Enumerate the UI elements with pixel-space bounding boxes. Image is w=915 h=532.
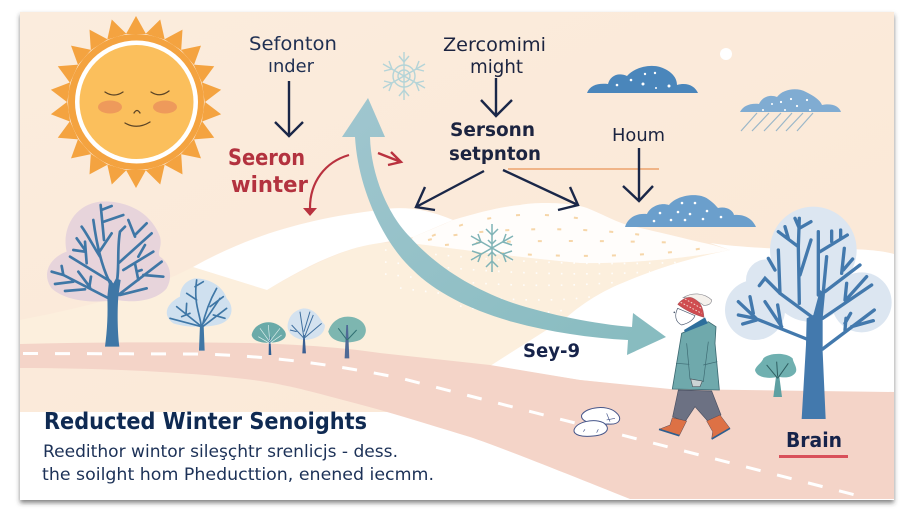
text: Seeron: Seeron [228, 146, 305, 171]
heading: Reducted Winter Senoights [44, 409, 367, 435]
text: Houm: Houm [612, 125, 665, 146]
cloud: dark blue [587, 66, 698, 93]
hill dots [428, 215, 705, 256]
snow hill left [193, 208, 453, 290]
snowflake: lower [471, 224, 513, 272]
hat crown [683, 294, 712, 306]
tree: small teal one [252, 322, 286, 355]
arrow: Zercomimi down [481, 78, 512, 116]
tree: small foreground [755, 354, 796, 397]
road [20, 342, 894, 499]
text: setpnton: setpnton [449, 143, 541, 165]
orange line [508, 168, 659, 170]
cloud: rain [740, 89, 841, 131]
tree: small blue one [288, 308, 325, 353]
hat band [678, 297, 704, 317]
text: Sefonton: Sefonton [249, 33, 337, 55]
cloud: lower [625, 195, 756, 227]
tree: small teal two [328, 317, 366, 358]
text block: summary [42, 409, 434, 485]
boots [659, 415, 730, 439]
text: might: might [470, 56, 523, 78]
arrow: Houm down [623, 148, 653, 201]
face [676, 308, 695, 325]
tree: right large [725, 207, 892, 419]
red curved arrow [303, 155, 349, 216]
body line 2: the soilght hom Pheducttion, enened iecmm. [42, 465, 434, 485]
body line 1: Reedithor wintor sileşçhtr srenlicjs - dess. [43, 442, 398, 462]
text: inder: ınder [268, 56, 315, 77]
label: Brain [779, 428, 848, 458]
glove [691, 379, 702, 387]
snow hill middle [410, 203, 730, 263]
text: Sersonn: Sersonn [450, 119, 535, 141]
person walking [659, 294, 730, 439]
arrow: to right hill [503, 170, 578, 210]
white dot [720, 48, 732, 60]
tree: left medium [167, 278, 232, 351]
tree: left large [47, 201, 170, 347]
snow field right [490, 243, 894, 395]
road dashes [23, 354, 863, 497]
large curved arrow [342, 98, 666, 355]
red small arrow [378, 152, 401, 165]
sky [20, 12, 894, 412]
arrow: to left hill [416, 171, 484, 210]
arrow: Sefonton down [275, 81, 303, 136]
label: Brain: Brain [786, 428, 842, 452]
snow rocks [574, 408, 620, 436]
snowflake: upper [383, 52, 425, 100]
text: Zercomimi: Zercomimi [443, 34, 546, 56]
sun [49, 16, 223, 188]
white sand dots [385, 250, 690, 313]
text: Sey-9: Sey-9 [523, 340, 580, 362]
scarf [684, 317, 708, 332]
lower sand ground [20, 243, 730, 366]
coat [672, 322, 719, 390]
legs [673, 390, 721, 422]
text: winter: winter [231, 173, 308, 198]
